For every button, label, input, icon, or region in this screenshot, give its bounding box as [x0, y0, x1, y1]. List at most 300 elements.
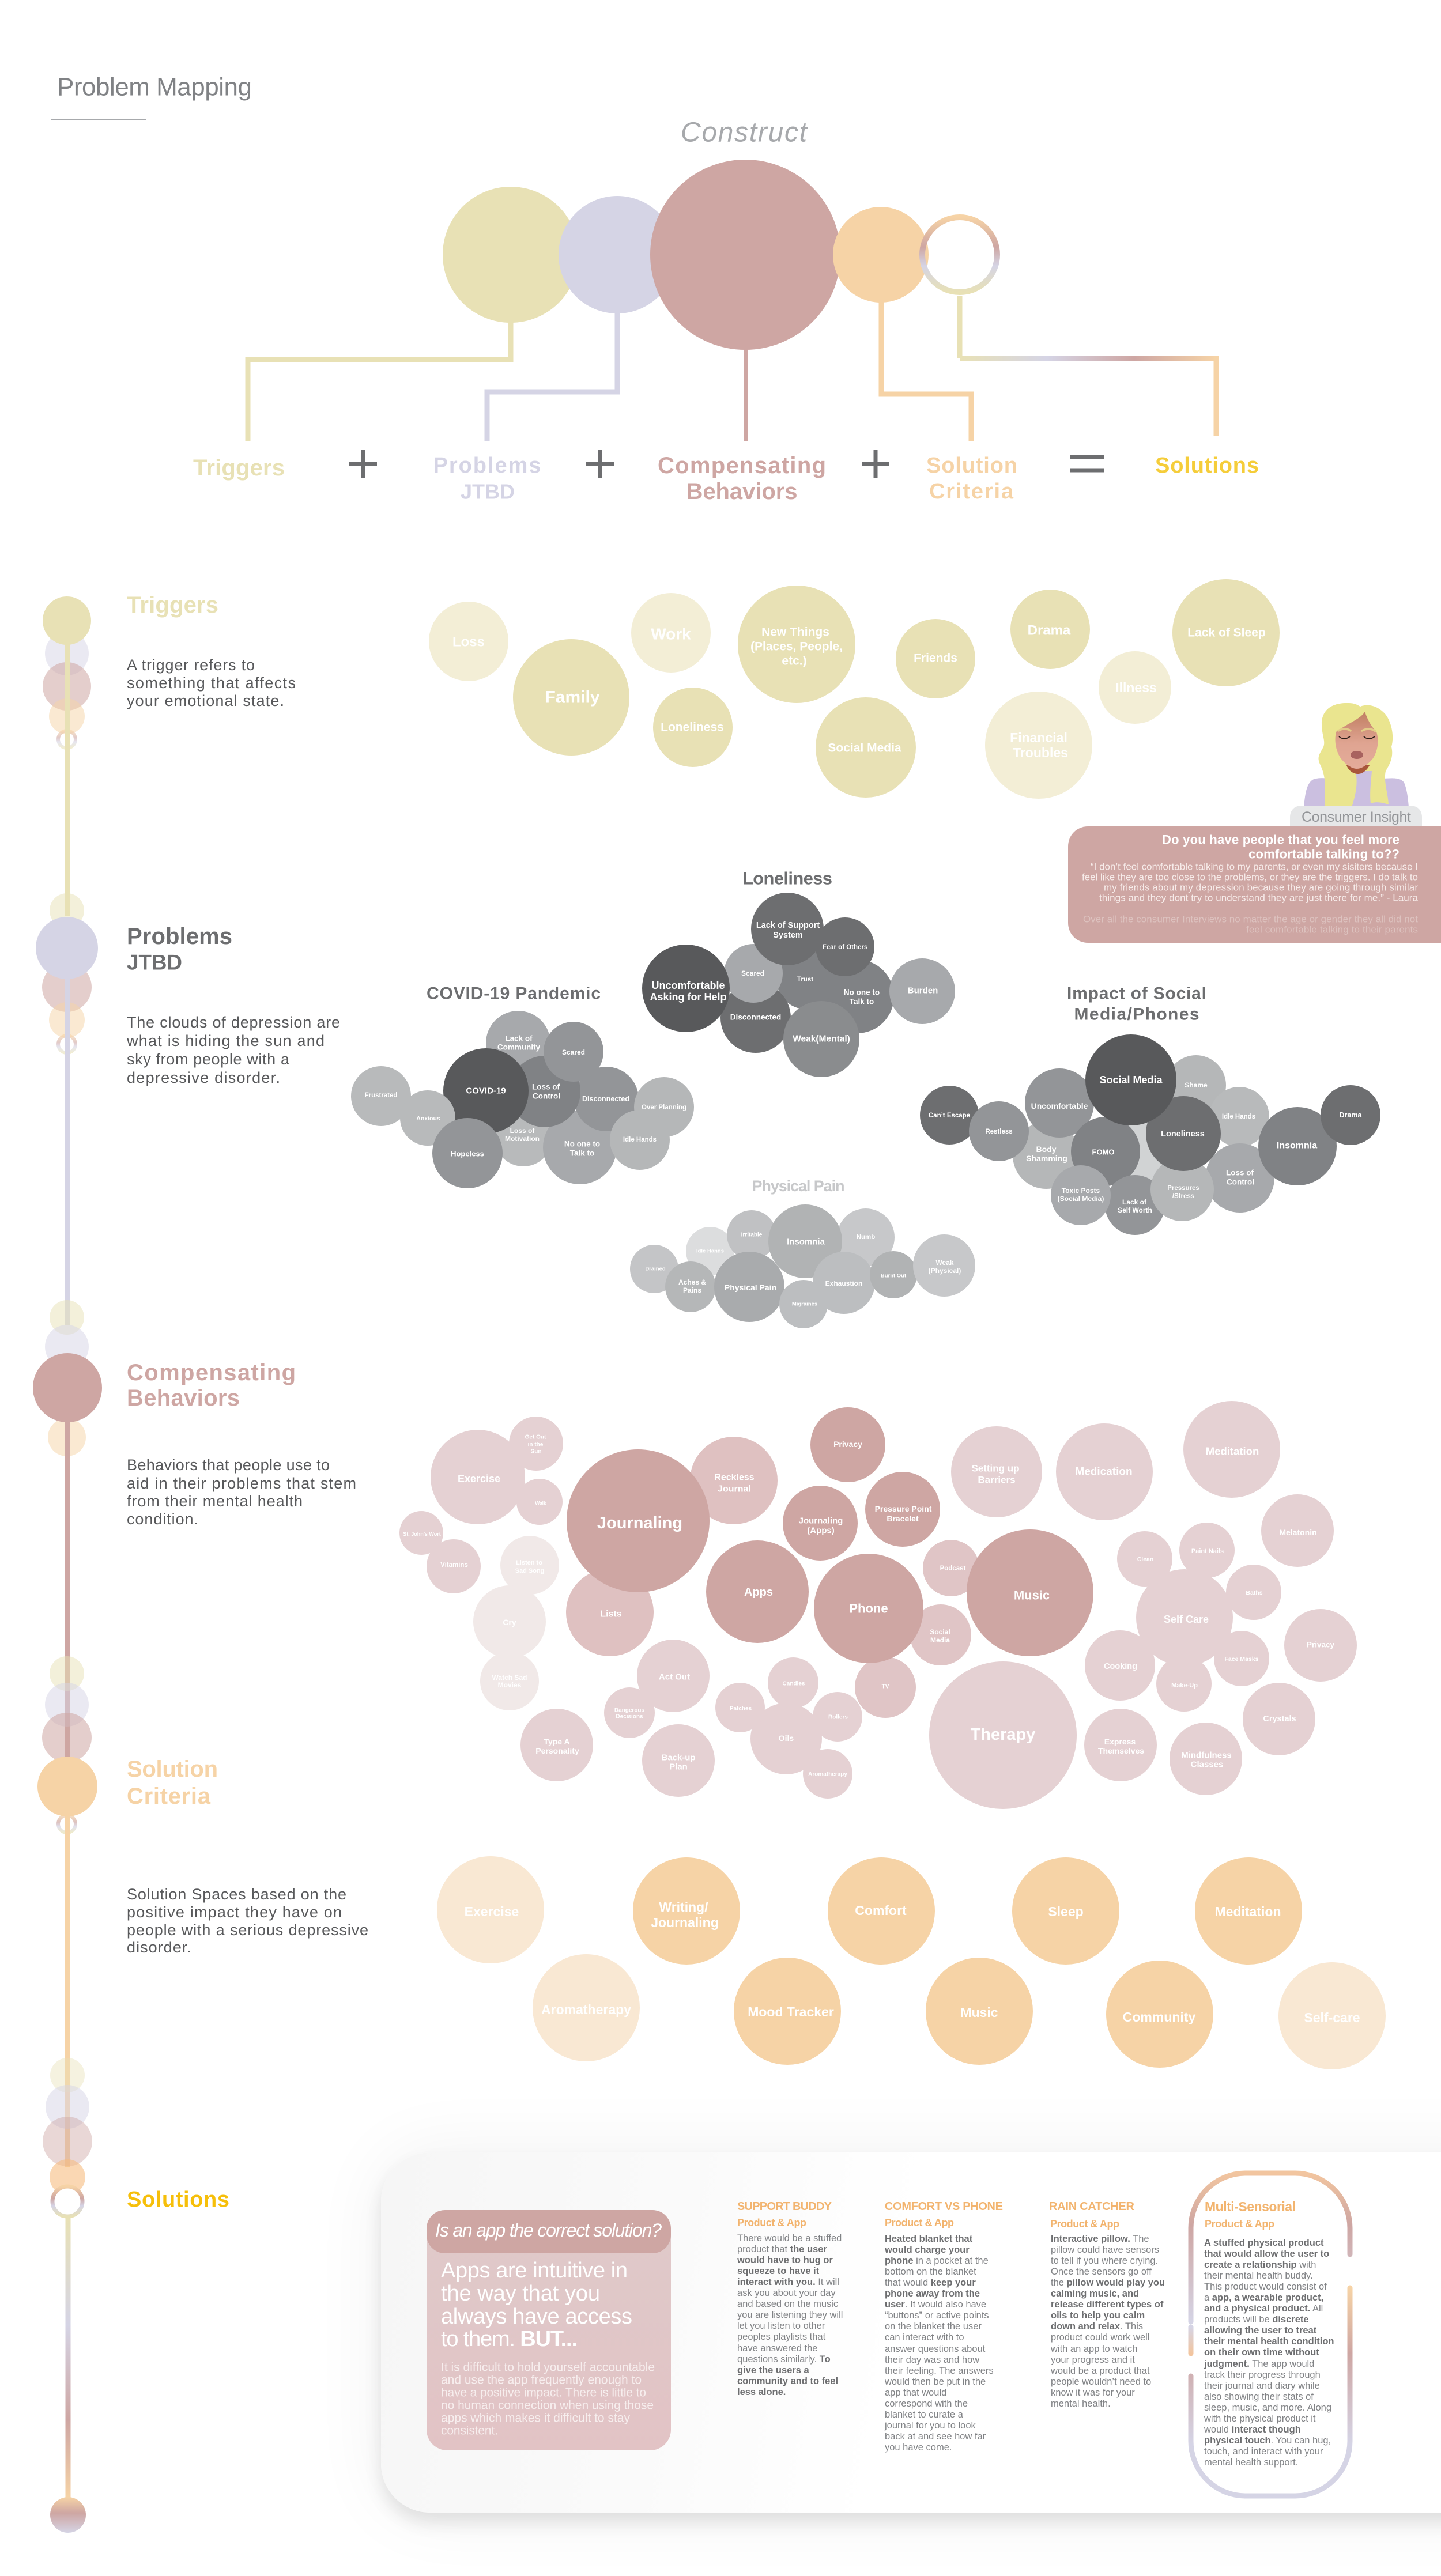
bubble: Friends [896, 619, 975, 698]
section: Solution Criteria label: Solution [127, 1757, 218, 1782]
section: Problems JTBD label [126, 924, 340, 1086]
ring: solutions [922, 217, 997, 292]
bubble: Lack of Support System: Lack of Support [756, 921, 820, 930]
bubble: Lack of Self Worth: Lack of [1122, 1198, 1147, 1206]
timeline: compensating behaviors section [33, 1300, 102, 1758]
bubble: TV: TV [882, 1684, 889, 1690]
label: Compensating Behaviors: Compensating [658, 453, 826, 478]
bubble: Social Media: Social [930, 1628, 950, 1636]
section: Triggers label: Triggers [127, 592, 218, 618]
bubble: Restless [969, 1101, 1029, 1161]
bubble: Drained: Drained [645, 1266, 666, 1272]
bubble: COVID-19 [443, 1048, 529, 1134]
label: Triggers: Triggers [193, 455, 285, 481]
concept: Multi-Sensorial highlighted: mental health support. [1204, 2457, 1298, 2468]
bubble: Face Masks: Face Masks [1225, 1656, 1259, 1663]
text: triggers description [127, 656, 296, 709]
connector: solutions vertical [957, 296, 963, 358]
concept: Multi-Sensorial highlighted: track their progress through [1204, 2370, 1321, 2380]
bubble: Idle Hands: Idle Hands [623, 1136, 657, 1143]
text: triggers description: your emotional state. [127, 692, 284, 709]
bubble: Loss of Motivation: Loss of [510, 1127, 535, 1135]
bubble: Lack of Support System: System [773, 931, 803, 940]
bubble: Self Care [1136, 1569, 1233, 1666]
cluster: COVID-19 Pandemic [351, 984, 694, 1188]
bubble: Sleep [1012, 1857, 1119, 1965]
text: problems description: The clouds of depression are [127, 1014, 340, 1031]
bubble: Insomnia [1258, 1107, 1337, 1185]
bubble: Scared: Scared [562, 1048, 585, 1056]
bubble: Aches & Pains: Pains [683, 1286, 701, 1294]
bubble: Over Planning: Over Planning [642, 1104, 686, 1111]
bubble: No one to Talk to [820, 960, 894, 1033]
concept: Comfort vs Phone: Product & App [885, 2217, 954, 2228]
bubble: Uncomfortable Asking for Help [642, 945, 730, 1032]
section: Solutions label: Solutions [127, 2188, 229, 2212]
bubble: Mood Tracker: Mood Tracker [748, 2004, 834, 2019]
text: app drawbacks: consistent. [441, 2424, 498, 2438]
bubble: Restless: Restless [985, 1128, 1013, 1135]
timeline: triggers section [43, 596, 91, 916]
bubble: Migraines: Migraines [792, 1301, 817, 1307]
bubble: Get Out in the Sun [509, 1417, 563, 1471]
label: Solution Criteria [926, 454, 1017, 504]
bubble: Cry [473, 1585, 546, 1658]
bubble: Scared [544, 1022, 603, 1082]
bubble: Idle Hands [686, 1227, 734, 1275]
bubble: Loneliness: Loneliness [1161, 1130, 1205, 1139]
bubble: Cooking [1085, 1630, 1155, 1701]
bubble: Toxic Posts (Social Media): Toxic Posts [1062, 1187, 1100, 1195]
bubble: Paint Nails: Paint Nails [1191, 1548, 1224, 1555]
text: problems description: sky from people with a [127, 1051, 290, 1068]
bubble: Comfort: Comfort [855, 1903, 907, 1918]
bubble: Toxic Posts (Social Media) [1051, 1165, 1111, 1225]
bubble: Financial Troubles [985, 692, 1092, 799]
section: Compensating Behaviors label [127, 1360, 356, 1528]
callout: consumer insight [1068, 806, 1441, 943]
bubble: Trust [776, 950, 835, 1009]
concept: Multi-Sensorial highlighted: A stuffed physical product [1204, 2238, 1324, 2248]
circle: triggers [443, 187, 579, 323]
icon: plus [349, 450, 377, 478]
bubble: St. John's Wort [399, 1511, 443, 1555]
bubble: Walk: Walk [535, 1500, 546, 1506]
bubble: Irritable [727, 1210, 776, 1260]
timeline: solutions section [43, 2058, 92, 2533]
bubble: Pressures/Stress: /Stress [1172, 1193, 1194, 1200]
circle: compensating behaviors [650, 160, 840, 350]
bubble: Social Media: Media [930, 1636, 950, 1644]
bubble: Trust: Trust [797, 976, 813, 983]
concept: Multi-Sensorial highlighted: and a physical product. All [1204, 2303, 1323, 2314]
concept: Multi-Sensorial highlighted: on their own time without [1204, 2347, 1319, 2358]
bubble: New Things: New Things [761, 626, 829, 639]
bubble: Pressures/Stress: Pressures [1167, 1185, 1199, 1192]
bubble: Lack of Sleep [1172, 579, 1280, 686]
concept: Multi-Sensorial highlighted: would interact though [1204, 2424, 1301, 2435]
bubble: Get Out in the Sun: Sun [531, 1449, 541, 1455]
concept: Support Buddy: ask you about your day [737, 2288, 836, 2298]
bubble: Disconnected [720, 983, 791, 1053]
heading: Construct: Construct [681, 118, 808, 148]
bubble: Burnt Out [870, 1251, 917, 1298]
label: Compensating Behaviors [658, 453, 826, 504]
concept: Support Buddy: squeeze to have it [737, 2266, 820, 2276]
bubble: Writing/Journaling: Journaling [651, 1915, 719, 1930]
bubbles: solution criteria [437, 1856, 1386, 2069]
text: behaviors description: aid in their problems that stem [127, 1475, 356, 1492]
bubble: Cooking: Cooking [1104, 1662, 1137, 1671]
text: quote: my friends about my depression because they are going through similar [1104, 882, 1418, 893]
bubble: Medication [1056, 1423, 1153, 1520]
concept: Comfort vs Phone: app that would [885, 2388, 946, 2398]
bubble: New Things [738, 586, 855, 703]
bubble: Back-up Plan: Back-up [661, 1753, 696, 1762]
heading: Impact of Social Media/Phones: Media/Phones [1074, 1005, 1199, 1023]
text: solution criteria description: disorder. [127, 1939, 191, 1956]
bubble: Uncomfortable: Uncomfortable [1031, 1101, 1088, 1111]
bubble: Aromatherapy [533, 1954, 640, 2061]
heading: Impact of Social Media/Phones: Impact of Social [1067, 984, 1206, 1003]
concept: Support Buddy: let you listen to other [737, 2321, 825, 2331]
bubble: Walk [516, 1479, 563, 1525]
text: problems description: what is hiding the sun and [126, 1032, 325, 1049]
bubble: Aches & Pains: Aches & [678, 1278, 706, 1286]
bubble: Uncomfortable Asking for Help: Uncomfortable [651, 980, 725, 991]
panel: solutions card background [381, 2152, 1441, 2513]
concept: Comfort vs Phone: would charge your [884, 2245, 970, 2255]
bubble: Exercise: Exercise [465, 1904, 519, 1919]
connector: solutions horizontal [960, 356, 1216, 361]
concept: Comfort vs Phone: bottom on the blanket [885, 2267, 976, 2277]
bubble: Exhaustion: Exhaustion [825, 1279, 862, 1287]
illustration: consumer woman [1304, 703, 1409, 807]
concept: Multi-Sensorial highlighted: sleep, music, and more. Along [1204, 2403, 1331, 2413]
concept: Multi-Sensorial highlighted: a app, a wearable product, [1204, 2292, 1323, 2303]
concept: Multi-Sensorial highlighted: judgment. The app would [1204, 2359, 1314, 2369]
bubble: Lack of Support System [751, 893, 824, 965]
bubble: Can't Escape [920, 1086, 979, 1145]
bubble: Idle Hands: Idle Hands [696, 1248, 724, 1254]
bubble: Get Out in the Sun: Get Out [525, 1434, 546, 1441]
text: app drawbacks: and use the app frequently enough to [441, 2373, 642, 2387]
concept: Support Buddy: interact with you. It will [737, 2277, 839, 2287]
concept: Rain Catcher: RAIN CATCHER [1049, 2200, 1135, 2213]
bubble: Setting up Barriers [951, 1426, 1042, 1517]
bubble: Burden [889, 958, 955, 1024]
bubble: Journaling (Apps) [783, 1486, 858, 1561]
bubble: Clean [1117, 1531, 1172, 1587]
concept: Support Buddy: product that the user [737, 2244, 828, 2254]
bubble: Mood Tracker [734, 1958, 841, 2065]
bubble: Listen to Sad Song [500, 1536, 559, 1595]
bubble: Oils [750, 1703, 822, 1774]
bubble: Reckless Journal: Journal [718, 1485, 751, 1494]
section: Compensating Behaviors label: Compensating [127, 1360, 296, 1385]
bubble: Insomnia: Insomnia [1277, 1141, 1317, 1150]
concept: Multi-Sensorial highlighted: products will be discrete [1204, 2314, 1309, 2325]
concept: Comfort vs Phone [884, 2200, 1003, 2453]
concept: Rain Catcher: the pillow would play you [1051, 2277, 1165, 2288]
concept: Support Buddy: questions similarly. To [737, 2354, 831, 2365]
bubble: Make-Up [1156, 1656, 1212, 1712]
bubble: Sleep: Sleep [1048, 1904, 1084, 1919]
concept: Support Buddy: have answered the [737, 2343, 817, 2354]
bubble: Express Themselves [1084, 1709, 1157, 1781]
bubble: Loss [429, 602, 508, 681]
bubble: Social Media: Social Media [828, 741, 901, 755]
text: quote: “I don’t feel comfortable talking to my parents, or even my sisiters because I [1091, 861, 1418, 872]
text: app drawbacks: have a positive impact. There is little to [441, 2386, 646, 2400]
title: Problem Mapping [51, 73, 252, 120]
bubble: Illness: Illness [1115, 680, 1157, 695]
bubble: Rollers [813, 1692, 862, 1742]
bubble: Work: Work [651, 625, 691, 643]
bubble: Candles: Candles [783, 1680, 805, 1687]
heading: insight question: Do you have people that you feel more [1162, 832, 1399, 847]
text: apps statement: the way that you [441, 2282, 600, 2306]
bubble: Candles [768, 1657, 818, 1708]
bubble: Meditation: Meditation [1215, 1904, 1281, 1919]
section: Problems JTBD label: Problems [127, 924, 232, 949]
bubble: Disconnected: Disconnected [582, 1095, 629, 1103]
text: quote: things and they dont try to understand they are just there for me.” - Laura [1099, 892, 1419, 904]
bubble: Watch Sad Movies: Watch Sad [492, 1674, 527, 1682]
concept: Rain Catcher: your progress and it [1051, 2355, 1135, 2365]
bubble: Vitamins [427, 1539, 481, 1593]
bubble: Weak (Physical): (Physical) [929, 1267, 961, 1275]
tab: Consumer Insight [1290, 806, 1422, 829]
text: quote: feel like they are too close to the problems, or they are the triggers. I do talk to [1082, 871, 1418, 883]
bubble: Act Out [637, 1640, 710, 1712]
bubble: FOMO: FOMO [1092, 1148, 1115, 1156]
section: Solution Criteria label: Criteria [127, 1784, 211, 1809]
concept: Multi-Sensorial highlighted: with the physical product it [1204, 2413, 1316, 2424]
text: solution criteria description: positive impact they have on [127, 1903, 342, 1921]
bubble: Crystals [1243, 1683, 1315, 1755]
concept: Comfort vs Phone: phone away from the [885, 2288, 980, 2299]
concept: Support Buddy: and based on the music [737, 2299, 838, 2309]
concept: Multi-Sensorial highlighted: their mental health buddy. [1204, 2271, 1313, 2281]
bubble: Exercise [431, 1430, 525, 1524]
concept: Comfort vs Phone: back at and see how far [885, 2431, 986, 2442]
text: problems description [126, 1014, 340, 1086]
bubble: Loss of Control [1205, 1143, 1274, 1213]
concept: Rain Catcher: pillow could have sensors [1051, 2245, 1159, 2255]
bubble: Self Care: Self Care [1164, 1614, 1209, 1625]
bubble: Hopeless: Hopeless [451, 1149, 484, 1158]
connector: solution criteria [881, 300, 971, 441]
bubble: Scared [724, 944, 783, 1003]
bubble: Self-care: Self-care [1304, 2010, 1360, 2025]
label: Problems JTBD: Problems [433, 454, 541, 478]
bubble: Lack of Community [486, 1011, 550, 1075]
section: Triggers label [127, 592, 296, 709]
panel: insight quote [1068, 826, 1441, 943]
concept: Multi-Sensorial highlighted: This product would consist of [1204, 2282, 1327, 2292]
bubble: Drama: Drama [1028, 622, 1071, 639]
concept: Rain Catcher: people wouldn’t need to [1051, 2377, 1151, 2387]
bubble: Illness [1099, 651, 1171, 724]
text: apps statement: to them. BUT... [441, 2327, 578, 2351]
bubble: Body Shamming [1013, 1122, 1080, 1189]
bubble: No one to Talk to: No one to [844, 988, 880, 997]
concept: Rain Catcher: calming music, and [1051, 2288, 1139, 2299]
bubble: Privacy: Privacy [833, 1440, 862, 1449]
label: Compensating Behaviors: Behaviors [686, 479, 798, 504]
bubble: New Things: (Places, People, [750, 640, 843, 654]
concept: Multi-Sensorial highlighted: that would allow the user to [1204, 2249, 1329, 2259]
bubble: Anxious: Anxious [416, 1115, 440, 1122]
bubble: Aromatherapy: Aromatherapy [541, 2002, 631, 2017]
bubble: Friends: Friends [914, 651, 957, 665]
text: apps statement: Apps are intuitive in [441, 2258, 628, 2283]
bubble: Mindfulness Classes [1170, 1723, 1242, 1795]
bubble: Social Media: Social Media [1099, 1074, 1163, 1086]
bubble: Music [926, 1958, 1033, 2065]
concept: Comfort vs Phone: journal for you to look [884, 2420, 976, 2431]
bubble: Self-care [1278, 1962, 1386, 2069]
circle: solution criteria [833, 207, 929, 303]
bubble: Act Out: Act Out [659, 1672, 690, 1682]
bubble: Listen to Sad Song: Listen to [516, 1559, 542, 1566]
bubble: Reckless Journal [690, 1437, 778, 1524]
bubble: Express Themselves: Themselves [1098, 1746, 1144, 1755]
bubble: Baths: Baths [1246, 1589, 1263, 1596]
text: solution criteria description: people with a serious depressive [127, 1921, 368, 1939]
bubble: Loss of Control: Control [1227, 1178, 1254, 1186]
bubble: Loss: Loss [452, 634, 485, 650]
bubble: Disconnected [574, 1067, 639, 1131]
bubble: Meditation: Meditation [1206, 1445, 1259, 1457]
concept: Rain Catcher: product could work well [1051, 2332, 1149, 2343]
bubble: Numb: Numb [857, 1234, 875, 1241]
bubble: Mindfulness Classes: Mindfulness [1181, 1751, 1232, 1760]
text: behaviors description: from their mental health [127, 1493, 303, 1510]
bubble: Therapy [929, 1661, 1077, 1809]
bubble: Patches [715, 1683, 765, 1732]
bubble: Loneliness [1146, 1096, 1221, 1171]
bubble: Loss of Control [509, 1056, 580, 1127]
bubble: Dangerous Decisions [604, 1687, 655, 1738]
bubble: Journaling [567, 1449, 710, 1592]
bubble: Numb [837, 1208, 895, 1266]
bubble: Pressure Point Bracelet: Pressure Point [875, 1504, 932, 1513]
bubble: Body Shamming: Shamming [1026, 1154, 1067, 1163]
text: interview note: Over all the consumer Interviews no matter the age or gender they all did not [1083, 914, 1418, 924]
cluster: Impact of Social Media/Phones [920, 984, 1380, 1235]
text: apps statement [441, 2258, 632, 2351]
bubble: Idle Hands: Idle Hands [1222, 1113, 1255, 1120]
concept: Comfort vs Phone: can interact with to [885, 2332, 964, 2343]
bubble: Scared: Scared [741, 969, 764, 977]
bubble: COVID-19: COVID-19 [466, 1086, 506, 1096]
bubble: Type A Personality: Personality [535, 1746, 579, 1755]
bubble: Weak (Physical) [913, 1234, 975, 1297]
bubble: Weak(Mental) [783, 1001, 859, 1077]
bubble: Face Masks [1214, 1631, 1269, 1686]
concept: Multi-Sensorial highlighted: Product & App [1205, 2218, 1274, 2230]
bubble: Migraines [779, 1280, 828, 1328]
concept: Rain Catcher: Product & App [1050, 2218, 1119, 2230]
bubble: Aches & Pains [665, 1261, 716, 1312]
bubble: Insomnia: Insomnia [787, 1237, 825, 1247]
bubble: Lack of Self Worth [1105, 1175, 1165, 1235]
bubble: Uncomfortable [1025, 1068, 1094, 1138]
bubble: Lack of Community: Lack of [505, 1034, 533, 1043]
bubble: Oils: Oils [779, 1733, 794, 1743]
concept: Multi-Sensorial highlighted [1191, 2173, 1350, 2496]
bubble: Loneliness [653, 688, 733, 767]
bubble: Type A Personality: Type A [544, 1737, 570, 1746]
bubble: Melatonin [1261, 1494, 1334, 1567]
bubble: Exercise [437, 1856, 544, 1963]
bubble: Privacy: Privacy [1307, 1640, 1335, 1649]
text: app drawbacks [441, 2360, 655, 2438]
bubble: Burden: Burden [908, 985, 938, 996]
bubble: Mindfulness Classes: Classes [1191, 1760, 1223, 1769]
concept: Rain Catcher: Once the sensors go off [1051, 2267, 1152, 2277]
bubble: Social Media [816, 697, 916, 798]
bubble: Meditation [1195, 1857, 1302, 1965]
bubble: Listen to Sad Song: Sad Song [515, 1567, 544, 1574]
bubble: Dangerous Decisions: Decisions [616, 1714, 643, 1720]
bubble: Can't Escape: Can’t Escape [929, 1112, 970, 1119]
concept: Comfort vs Phone: on the blanket the user [885, 2321, 982, 2332]
concept: Comfort vs Phone: you have come. [885, 2442, 952, 2453]
bubble: Lack of Community: Community [497, 1043, 541, 1051]
bubble: Frustrated [351, 1066, 411, 1126]
bubble: No one to Talk to: No one to [564, 1140, 600, 1148]
bubble: FOMO [1071, 1117, 1140, 1186]
bubble: Pressure Point Bracelet: Bracelet [887, 1514, 919, 1523]
concept: Support Buddy [737, 2200, 843, 2397]
text: triggers description: A trigger refers to [127, 656, 255, 674]
bubble: Financial Troubles: Financial [1010, 730, 1067, 745]
bubble: Loss of Motivation: Motivation [505, 1135, 540, 1143]
panel: is an app the correct solution [427, 2210, 671, 2450]
bubble: Physical Pain: Physical Pain [725, 1283, 776, 1292]
bubble: Disconnected: Disconnected [730, 1013, 781, 1021]
bubble: Meditation [1183, 1401, 1280, 1498]
bubbles: compensating behaviors [399, 1401, 1357, 1809]
bubble: Aromatherapy [803, 1749, 852, 1799]
concept: Rain Catcher: know it was for your [1051, 2388, 1135, 2398]
bubble: Privacy [810, 1407, 885, 1482]
connector: problems [487, 311, 617, 441]
concept: Comfort vs Phone: blanket to curate a [885, 2409, 964, 2420]
icon: equals [1070, 457, 1104, 470]
bubble: Financial Troubles: Troubles [1013, 745, 1068, 760]
bubble: Phone: Phone [849, 1601, 888, 1616]
bubble: Baths [1226, 1565, 1281, 1620]
bubble: Loss of Control: Control [533, 1091, 560, 1101]
tab: Consumer Insight: Consumer Insight [1302, 809, 1411, 825]
bubble: Setting up Barriers: Setting up [971, 1463, 1020, 1474]
text: behaviors description: condition. [127, 1510, 198, 1528]
icon: plus [862, 450, 889, 478]
header: question [427, 2210, 671, 2253]
concept: Support Buddy: There would be a stuffed [737, 2233, 842, 2243]
concept: Support Buddy: SUPPORT BUDDY [737, 2200, 832, 2213]
bubble: Watch Sad Movies [480, 1652, 539, 1710]
concept: Support Buddy: you are listening they will [737, 2310, 843, 2320]
concept: Support Buddy: Product & App [737, 2217, 806, 2228]
concept: Comfort vs Phone: answer questions about [885, 2344, 986, 2354]
bubble: Express Themselves: Express [1104, 1737, 1136, 1746]
circle: problems [559, 196, 676, 313]
